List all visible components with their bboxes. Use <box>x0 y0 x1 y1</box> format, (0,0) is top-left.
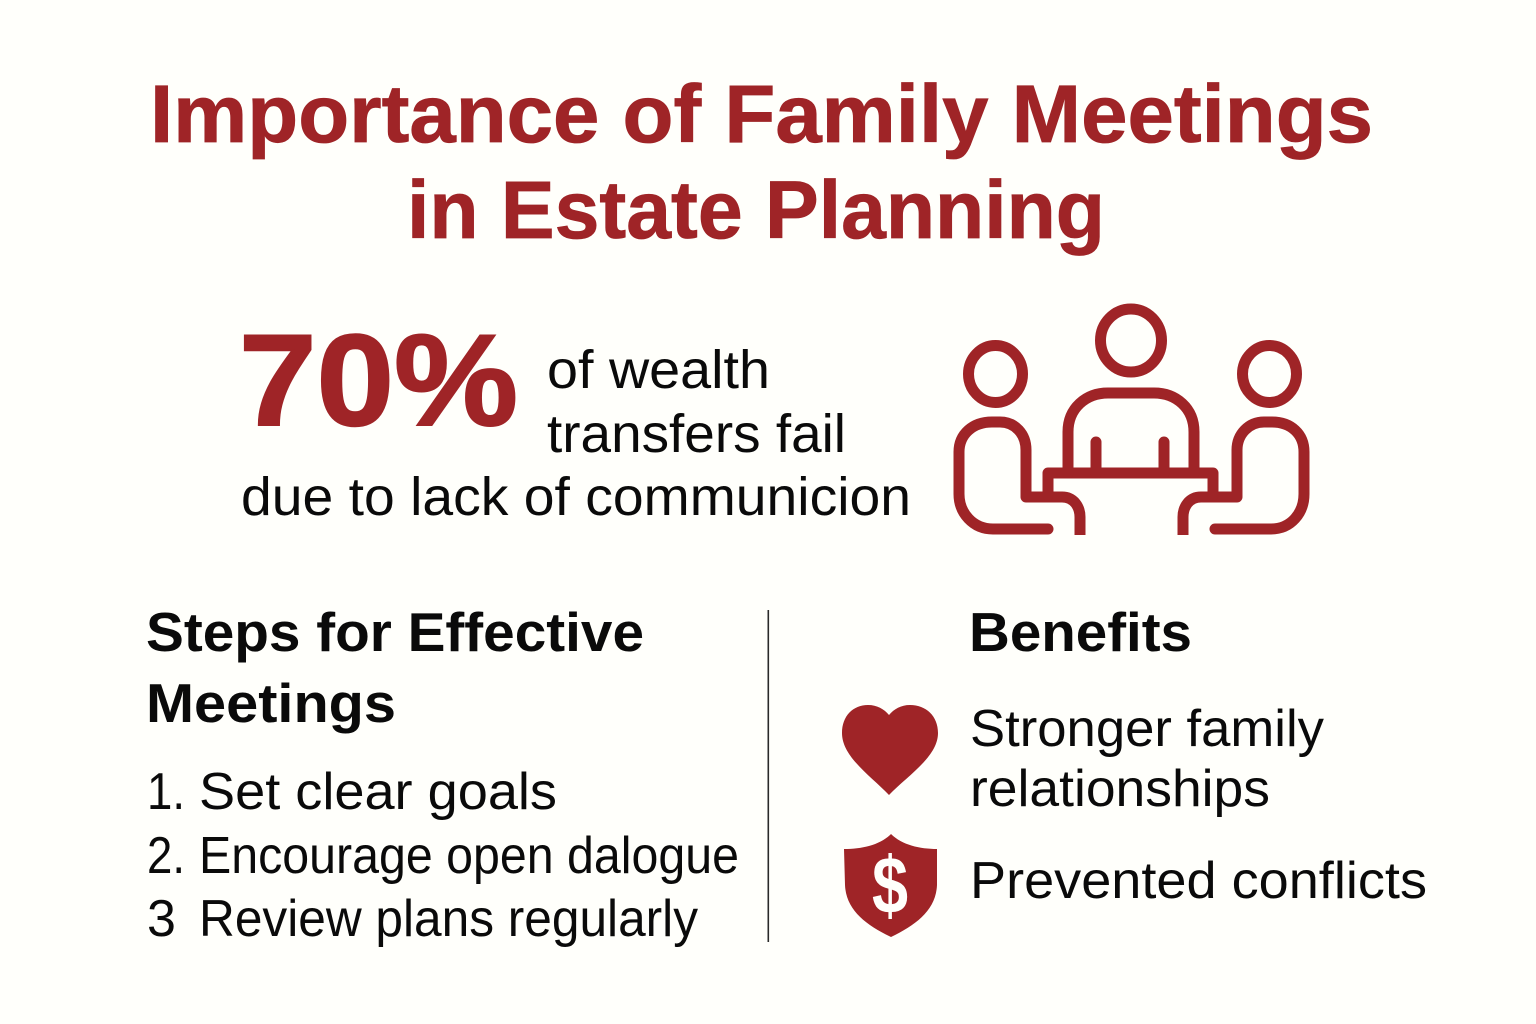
benefit: prevented conflicts: Prevented conflicts <box>970 852 1427 910</box>
icon: three people meeting at a table <box>959 309 1304 543</box>
icon: heart <box>842 705 938 795</box>
step 1: Set clear goals <box>199 763 557 821</box>
title: Importance of Family Meetings <box>150 69 1373 160</box>
step 3: Review plans regularly <box>199 890 698 948</box>
step 1: 1. <box>147 763 185 821</box>
heading: benefits: Benefits <box>969 601 1192 663</box>
icon: shield with dollar sign: $ <box>872 840 908 931</box>
stat description: due to lack of communicion <box>241 467 911 527</box>
title: in Estate Planning <box>407 165 1105 256</box>
heading: steps <box>146 601 644 734</box>
panel: statistic <box>239 307 911 527</box>
stat description: of wealth <box>547 340 770 400</box>
benefit: stronger family relationships: relationships <box>970 760 1270 818</box>
title <box>150 69 1373 256</box>
heading: steps: Meetings <box>146 672 396 734</box>
stat: 70%: 70% <box>239 307 518 453</box>
panel: steps for effective meetings <box>146 601 739 948</box>
icon: shield with dollar sign <box>844 834 937 937</box>
benefit: stronger family relationships <box>970 700 1324 818</box>
benefit: stronger family relationships: Stronger family <box>970 700 1324 758</box>
step 3: 3 <box>147 890 176 948</box>
stat description <box>241 340 911 527</box>
stat description: transfers fail <box>547 404 846 464</box>
step 2: 2. <box>147 827 185 885</box>
step 2: Encourage open dalogue <box>199 827 739 885</box>
heading: steps: Steps for Effective <box>146 601 644 663</box>
panel: benefits <box>842 601 1427 937</box>
